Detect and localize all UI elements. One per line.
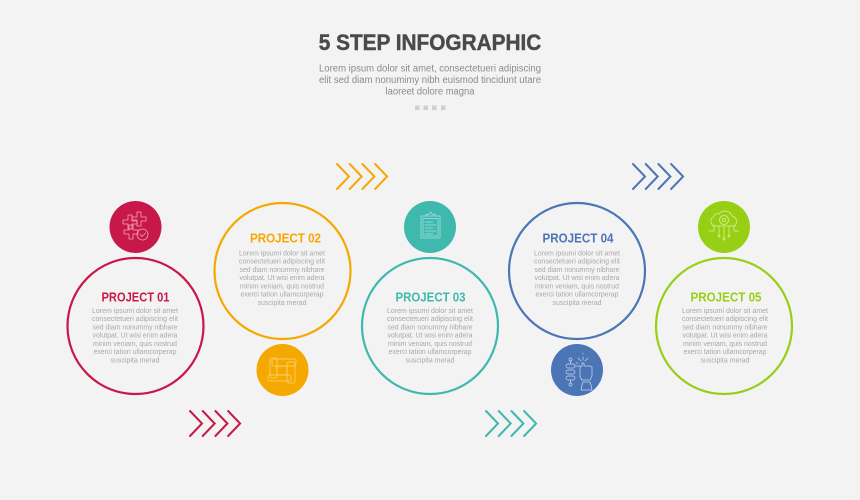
text: project 04 description: volutpat. Ut wisi enim adera [534, 275, 620, 282]
icon: clipboard [404, 201, 456, 253]
subtitle text block: elit sed diam nonumimy nibh euismod tincidunt utare [319, 75, 541, 86]
text: project 04 description: Lorem ipsumi dolor sit amet [534, 250, 620, 258]
panel: project 05 [656, 258, 792, 394]
text: project 01 description: minim veniam, quis nostrud [93, 341, 177, 348]
text: project 03 description: minim veniam, quis nostrud [388, 341, 472, 348]
text: project 02 description: suscipita merad [258, 300, 307, 307]
icon: flowchart and touching hand [551, 344, 603, 396]
text: project 02 description: exerci tation ullamcorperap [240, 292, 324, 299]
text: project 01 description: sed diam nonummy nibhare [92, 324, 178, 332]
text: project 01 description [92, 308, 178, 364]
text: project 01 description: volutpat. Ut wisi enim adera [92, 333, 178, 340]
title dots [415, 106, 446, 110]
text: project 03 description [387, 308, 473, 364]
panel: project 01 [68, 258, 204, 394]
text: project 03 description: volutpat. Ut wisi enim adera [388, 333, 473, 340]
text: project 01 description: exerci tation ullamcorperap [94, 349, 177, 356]
text: project 04 description: minim veniam, quis nostrud [535, 284, 619, 290]
text: project 05 description: exerci tation ullamcorperap [684, 349, 767, 356]
text: project 05 description: minim veniam, quis nostrud [683, 341, 767, 348]
text: project 03 description: suscipita merad [406, 358, 455, 364]
heading: project 01: PROJECT 01 [102, 290, 170, 304]
text: project 05 description: suscipita merad [700, 358, 750, 364]
heading: project 03: PROJECT 03 [396, 290, 466, 304]
text: project 04 description: sed diam nonummy nibhare [534, 267, 620, 274]
text: project 02 description: Lorem ipsumi dolor sit amet [239, 250, 325, 258]
heading: project 05: PROJECT 05 [690, 290, 762, 304]
subtitle text block: Lorem ipsum dolor sit amet, consectetueri adipiscing [319, 64, 541, 74]
title: 5 STEP INFOGRAPHIC [319, 30, 541, 55]
text: project 02 description: minim veniam, quis nostrud [240, 284, 324, 290]
text: project 03 description: sed diam nonummy nibhare [388, 324, 473, 332]
text: project 04 description: exerci tation ullamcorperap [536, 292, 619, 299]
text: project 03 description: Lorem ipsumi dolor sit amet [387, 308, 473, 315]
text: project 05 description [682, 308, 768, 364]
text: project 02 description: consectetueri adipiscing elit [239, 259, 325, 266]
subtitle text block: laoreet dolore magna [386, 86, 475, 98]
text: project 05 description: sed diam nonummy nibhare [682, 324, 768, 332]
panel: project 02 [214, 203, 350, 339]
text: project 04 description: suscipita merad [552, 300, 602, 307]
subtitle text block [319, 64, 541, 98]
arrow: chevrons red [190, 411, 240, 436]
icon: cloud network [698, 201, 750, 253]
text: project 04 description: consectetueri adipiscing elit [534, 259, 620, 266]
icon: puzzle with check [110, 201, 162, 253]
text: project 03 description: consectetueri adipiscing elit [387, 316, 473, 323]
text: project 04 description [534, 250, 620, 307]
arrow: chevrons orange [337, 164, 387, 189]
text: project 05 description: volutpat. Ut wisi enim adera [682, 333, 768, 340]
icon: joined hands [256, 344, 308, 396]
text: project 01 description: Lorem ipsumi dolor sit amet [92, 308, 178, 315]
arrow: chevrons teal [486, 411, 536, 436]
text: project 02 description [239, 250, 325, 307]
arrow: chevrons blue [633, 164, 683, 189]
panel: project 04 [509, 203, 645, 339]
heading: project 02: PROJECT 02 [250, 232, 321, 246]
text: project 05 description: consectetueri adipiscing elit [682, 316, 768, 323]
text: project 02 description: sed diam nonummy nibhare [240, 267, 325, 274]
text: project 01 description: consectetueri adipiscing elit [92, 316, 178, 323]
text: project 02 description: volutpat. Ut wisi enim adera [240, 275, 325, 282]
heading: project 04: PROJECT 04 [542, 232, 614, 246]
text: project 05 description: Lorem ipsumi dolor sit amet [682, 308, 768, 315]
text: project 01 description: suscipita merad [110, 358, 160, 364]
text: project 03 description: exerci tation ullamcorperap [388, 349, 472, 356]
panel: project 03 [362, 258, 498, 394]
